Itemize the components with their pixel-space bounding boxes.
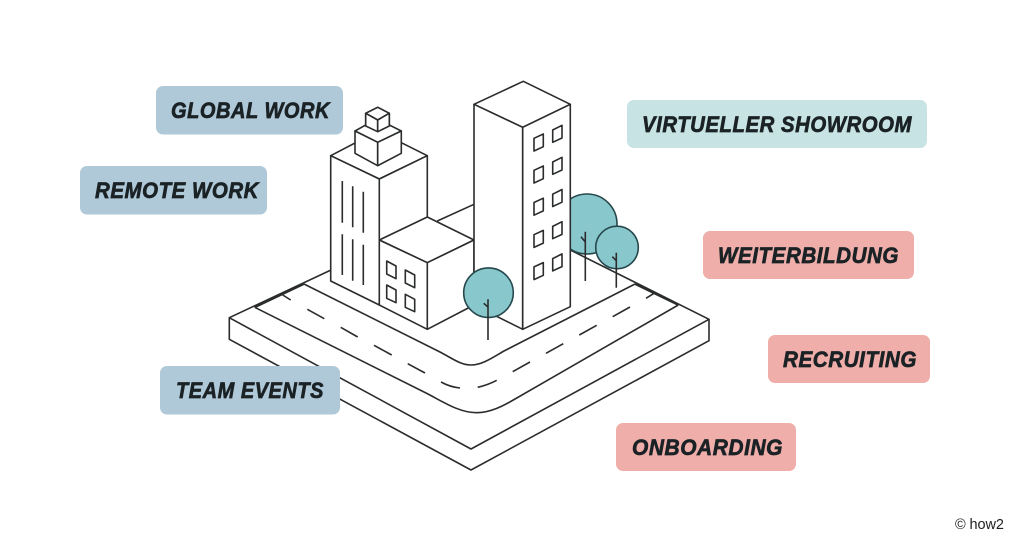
label: Recruiting	[768, 335, 930, 383]
label: Team Events	[160, 366, 340, 414]
tree: large back	[557, 194, 617, 281]
label: Virtueller Showroom	[627, 100, 927, 148]
back ground line	[437, 204, 474, 221]
copyright: © how2	[955, 517, 1004, 533]
label: Onboarding	[616, 423, 796, 471]
building: rooftop cubes	[355, 107, 401, 166]
label: Recruiting: RECRUITING	[783, 347, 917, 372]
building: left tower	[331, 131, 427, 305]
label: Remote Work: REMOTE WORK	[95, 178, 260, 203]
label: Global Work	[156, 86, 343, 134]
road	[255, 284, 678, 413]
label: Global Work: GLOBAL WORK	[171, 98, 331, 123]
building: tall tower	[474, 81, 570, 329]
tree: small back	[596, 226, 638, 288]
label: Remote Work	[80, 166, 267, 214]
building: low block	[379, 217, 474, 329]
label: Weiterbildung: WEITERBILDUNG	[718, 243, 899, 268]
illustration: isometric city block	[229, 81, 709, 470]
tree: front	[464, 268, 513, 340]
label: Virtueller Showroom: VIRTUELLER SHOWROOM	[642, 112, 913, 137]
label: Onboarding: ONBOARDING	[632, 435, 783, 460]
label: Team Events: TEAM EVENTS	[176, 378, 324, 403]
ground base slab	[229, 250, 709, 470]
label: Weiterbildung	[703, 231, 914, 279]
